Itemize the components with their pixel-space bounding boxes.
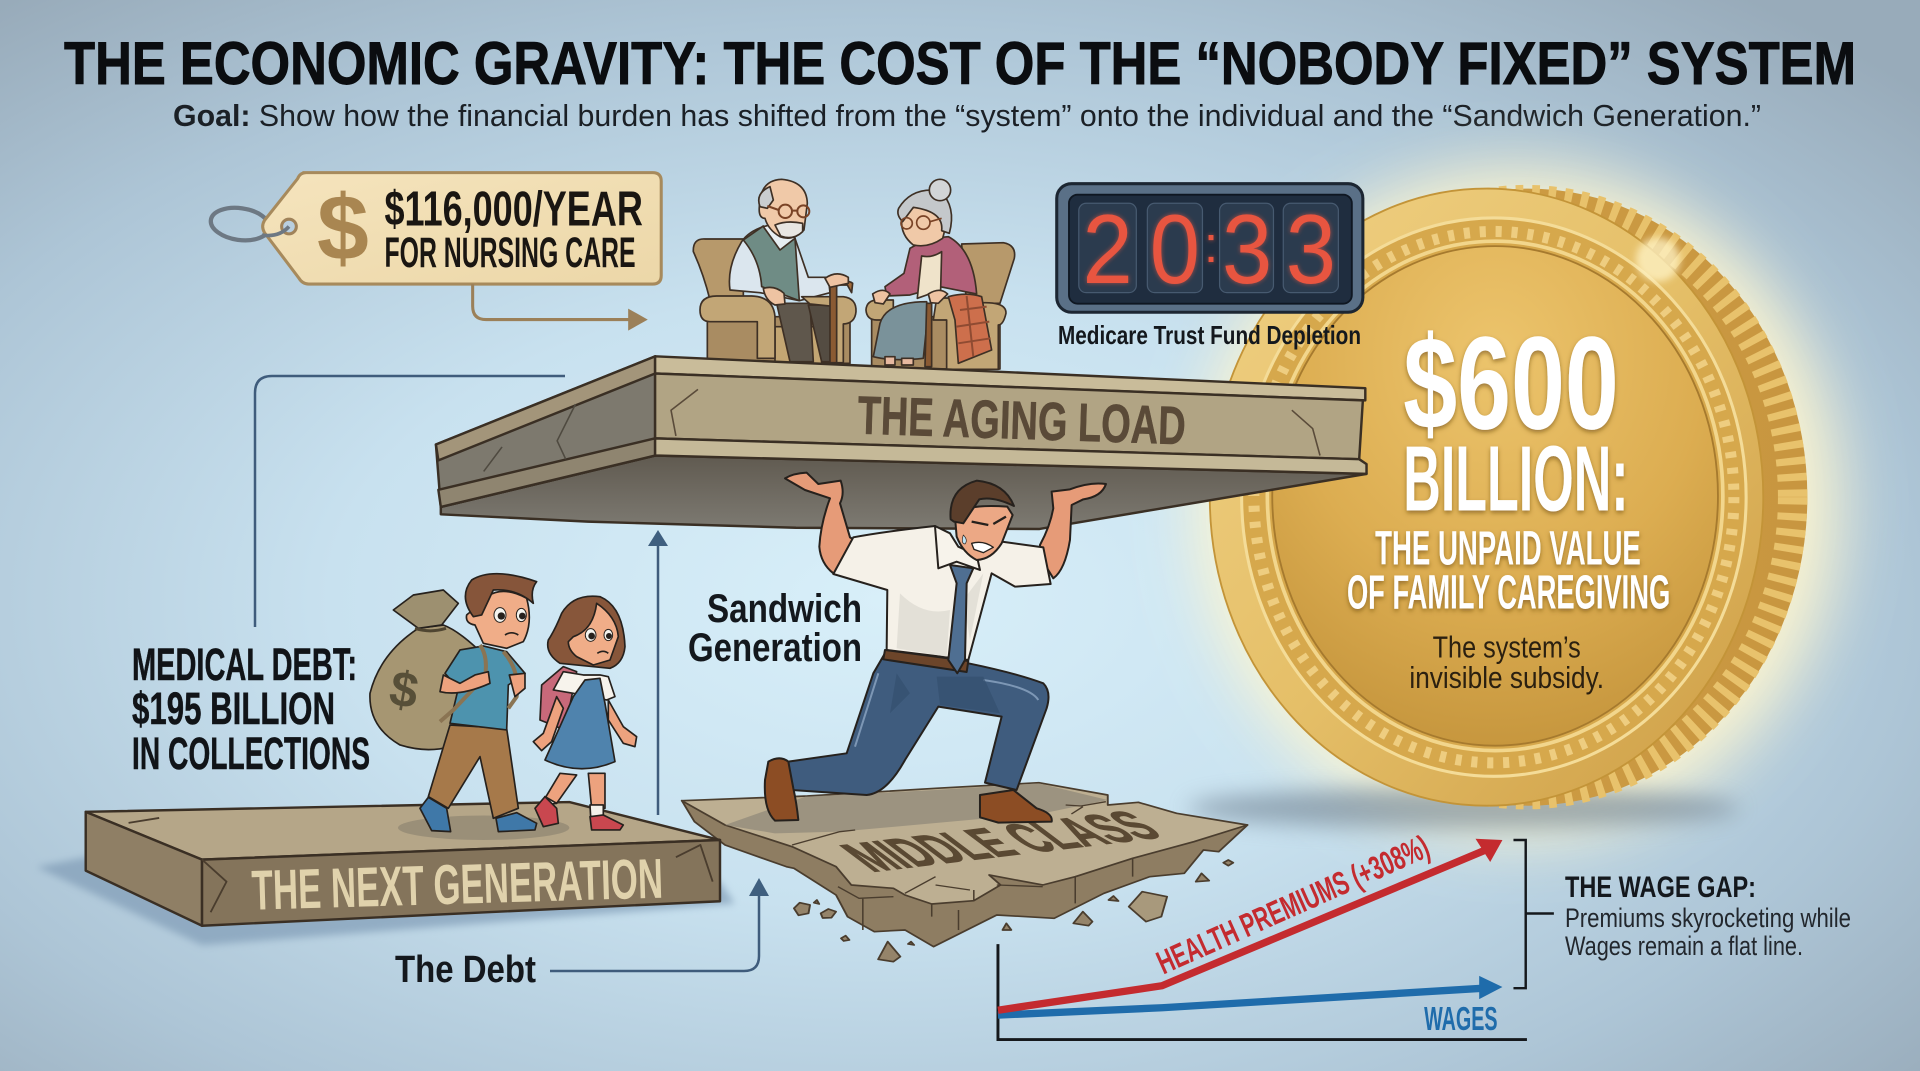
money sack: $ [385,660,423,720]
coin caption: The system’s [1433,631,1581,665]
elderly woman in armchair [866,179,1015,369]
tag text: FOR NURSING CARE [384,229,636,277]
clock digits: 2 [1082,194,1133,304]
wage gap text: THE WAGE GAP: [1565,871,1756,904]
coin headline text: OF FAMILY CAREGIVING [1347,567,1670,620]
health premiums arrow [998,839,1502,1010]
next generation slab [37,802,735,945]
tag body [263,173,661,284]
middle class label: MIDDLE CLASS [827,803,1177,881]
slab label: THE AGING LOAD [857,385,1187,456]
rear shoe [765,758,798,821]
front shoe [980,790,1052,823]
coin caption [1409,631,1604,695]
coin caption: invisible subsidy. [1409,661,1604,695]
slab top [86,802,720,860]
shirt [833,526,1051,660]
countdown clock: 2033 [1057,184,1363,312]
wage gap chart [998,829,1554,1040]
left arm [785,473,863,573]
belt [883,650,968,672]
coin headline text: BILLION: [1403,427,1629,531]
sandwich arrow [648,530,668,815]
stone top [682,783,1247,904]
children with debt sack [370,574,637,832]
medical debt callout: MEDICAL DEBT: [132,639,357,690]
wage gap text: Wages remain a flat line. [1565,931,1803,961]
slab left side [86,812,202,926]
slab ground shadow [37,857,735,945]
subtitle: Goal: Show how the financial burden has shifted from the “system” onto the individual and the “Sandwich Generation.” [173,98,1761,133]
sandwich generation label: Sandwich [707,587,862,631]
wage gap text: Premiums skyrocketing while [1565,903,1851,933]
necktie [948,565,973,673]
coin ground shadow [1188,787,1739,829]
clock housing [1057,184,1363,312]
coin edge [1249,189,1807,806]
wage gap text [1565,871,1851,961]
slab top edge [655,356,1365,400]
clock label: Medicare Trust Fund Depletion [1058,320,1361,350]
head [955,506,1013,560]
left connector line [255,376,565,627]
medical debt callout: IN COLLECTIONS [132,728,370,779]
tag arrow [473,284,648,331]
slab underside [441,456,1367,529]
aging load slab [436,356,1367,529]
sandwich generation label: Generation [688,626,862,670]
girl [533,596,637,830]
boy [420,574,537,832]
jeans [788,653,1049,795]
wages label: WAGES [1424,1001,1498,1038]
clock digits: 3 [1222,194,1272,304]
tag string [209,204,271,244]
sandwich generation man [765,473,1106,823]
health premiums label: HEALTH PREMIUMS (+308%) [1151,829,1435,982]
medical debt callout [132,639,370,779]
slab front face [655,373,1363,459]
tag text [384,182,643,277]
clock digits [1082,194,1336,304]
slab left side [436,356,655,507]
sandwich generation label [688,587,862,670]
price tag callout [209,173,661,331]
money sack [370,590,475,750]
slab label: THE NEXT GENERATION [251,847,664,922]
tag text: $116,000/YEAR [384,182,643,236]
coin headline text [1347,310,1670,620]
the debt label: The Debt [395,949,536,991]
elderly couple [693,179,1015,369]
wages arrow [998,976,1502,1015]
rubble [794,860,1233,962]
middle class cracked stone [682,783,1247,962]
coin headline text: $600 [1403,310,1619,458]
clock digits: 3 [1286,194,1336,304]
coin face [1210,189,1763,806]
debt arrow [550,878,769,971]
neck and collar [935,526,980,570]
elderly man in armchair [693,179,856,363]
slab front face [202,840,720,926]
chart axes [998,944,1527,1040]
clock digits: 0 [1150,194,1200,304]
coin: $600 billion [1188,169,1839,835]
coin headline text: THE UNPAID VALUE [1375,522,1641,575]
stone side [682,801,1247,947]
medical debt callout: $195 BILLION [132,683,335,734]
bracket [1513,840,1554,988]
tag dollar sign: $ [317,176,369,280]
right arm [1040,483,1106,578]
coin glow [1198,169,1839,835]
clock digits: : [1204,215,1218,273]
